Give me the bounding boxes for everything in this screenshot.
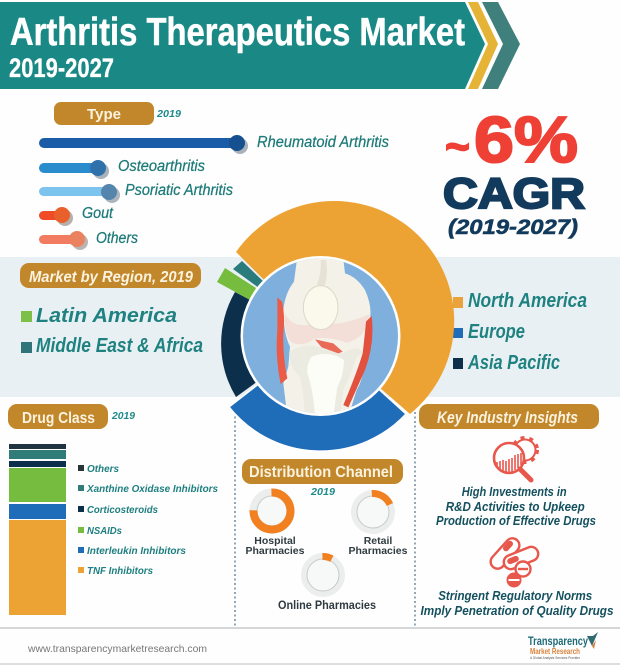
segment: middle east and africa (233, 261, 264, 288)
bar: gout (39, 205, 114, 226)
callout: CAGR (443, 103, 585, 239)
heading: key industry insights: Key Industry Insights (437, 408, 578, 427)
logo: transparency market research: Transparency (528, 634, 588, 648)
stacked bar chart (9, 444, 66, 615)
heading: key industry insights (419, 404, 599, 429)
heading: drug class (8, 404, 108, 429)
heading: distribution channel: Distribution Channel (249, 464, 393, 481)
gauge: retail pharmacies: Retail (364, 535, 392, 547)
heading: market by region: Market by Region, 2019 (29, 269, 193, 286)
panel: drug class (8, 404, 218, 615)
legend: interleukin inhibitors: Interleukin Inhibitors (87, 545, 186, 557)
dotted column divider right (414, 412, 416, 627)
segment: north america (236, 201, 454, 414)
segment: europe (229, 336, 406, 451)
website url: www.transparencymarketresearch.com (27, 643, 207, 655)
bar: psoriatic arthritis: Psoriatic Arthritis (125, 182, 233, 199)
logo: transparency market research: A Global Analysis Services Provider (530, 656, 581, 660)
logo: transparency market research: Market Research (530, 647, 580, 656)
callout: CAGR: CAGR (443, 170, 585, 218)
year label: 2019 (156, 109, 181, 120)
subtitle years: 2019-2027 (9, 53, 114, 83)
panel: distribution channel (242, 459, 408, 612)
text: high investments: High Investments in (462, 484, 567, 499)
panel: type (39, 102, 389, 250)
bar: osteoarthritis (39, 158, 205, 179)
gauge: retail pharmacies (349, 493, 408, 557)
heading: distribution channel (242, 459, 403, 484)
legend: tnf inhibitors: TNF Inhibitors (87, 565, 153, 577)
legend: corticosteroids: Corticosteroids (87, 504, 158, 516)
legend: middle east and africa: Middle East & Africa (36, 335, 203, 357)
segment: asia pacific (221, 292, 320, 397)
year label: 2019 (111, 411, 135, 422)
bar: others (39, 230, 138, 250)
legend: latin america: Latin America (36, 305, 177, 327)
bar: others: Others (96, 230, 138, 247)
legend: north america: North America (468, 290, 587, 312)
title: Arthritis Therapeutics Market (10, 11, 465, 54)
callout: CAGR: ~ (445, 120, 470, 172)
panel: market by region (0, 257, 620, 397)
panel: key industry insights (419, 404, 614, 618)
header banner (0, 2, 520, 89)
gauge: hospital pharmacies: Pharmacies (246, 545, 305, 557)
legend: xanthine oxidase inhibitors: Xanthine Oxidase Inhibitors (86, 483, 218, 495)
heading: type (54, 102, 154, 125)
gauge: hospital pharmacies (246, 492, 305, 557)
legend: europe: Europe (468, 321, 525, 343)
footer (0, 627, 620, 665)
year label: 2019 (310, 487, 335, 498)
legend: nsaids: NSAIDs (87, 525, 122, 537)
gauge: hospital pharmacies: Hospital (254, 535, 296, 547)
gauge: retail pharmacies: Pharmacies (349, 545, 408, 557)
icon: magnifier with gear (494, 438, 538, 480)
text: high investments: Production of Effective Drugs (436, 513, 596, 528)
text: high investments: R&D Activities to Upkeep (446, 499, 585, 514)
bar: osteoarthritis: Osteoarthritis (118, 158, 205, 175)
bar: psoriatic arthritis (39, 182, 233, 203)
callout: CAGR: (2019-2027) (448, 216, 578, 239)
donut chart: market by region (217, 201, 454, 451)
gauge: online pharmacies: Online Pharmacies (278, 598, 376, 612)
legend: europe (453, 321, 525, 343)
logo: transparency market research (528, 632, 598, 660)
segment: latin america (217, 268, 256, 300)
legend: others: Others (87, 463, 119, 475)
gauge: online pharmacies (278, 556, 376, 612)
knee illustration (240, 253, 400, 417)
bar: rheumatoid arthritis: Rheumatoid Arthritis (257, 134, 389, 151)
icon: pills (488, 535, 540, 588)
text: stringent regulatory norms: Stringent Regulatory Norms (438, 588, 592, 603)
legend: asia pacific: Asia Pacific (467, 352, 560, 374)
callout: CAGR: 6% (474, 103, 578, 176)
dotted column divider left (234, 412, 236, 627)
bar: gout: Gout (82, 205, 114, 222)
heading: market by region (20, 263, 201, 288)
heading: drug class: Drug Class (22, 410, 95, 427)
bar: rheumatoid arthritis (39, 134, 389, 154)
heading: type: Type (87, 106, 121, 123)
